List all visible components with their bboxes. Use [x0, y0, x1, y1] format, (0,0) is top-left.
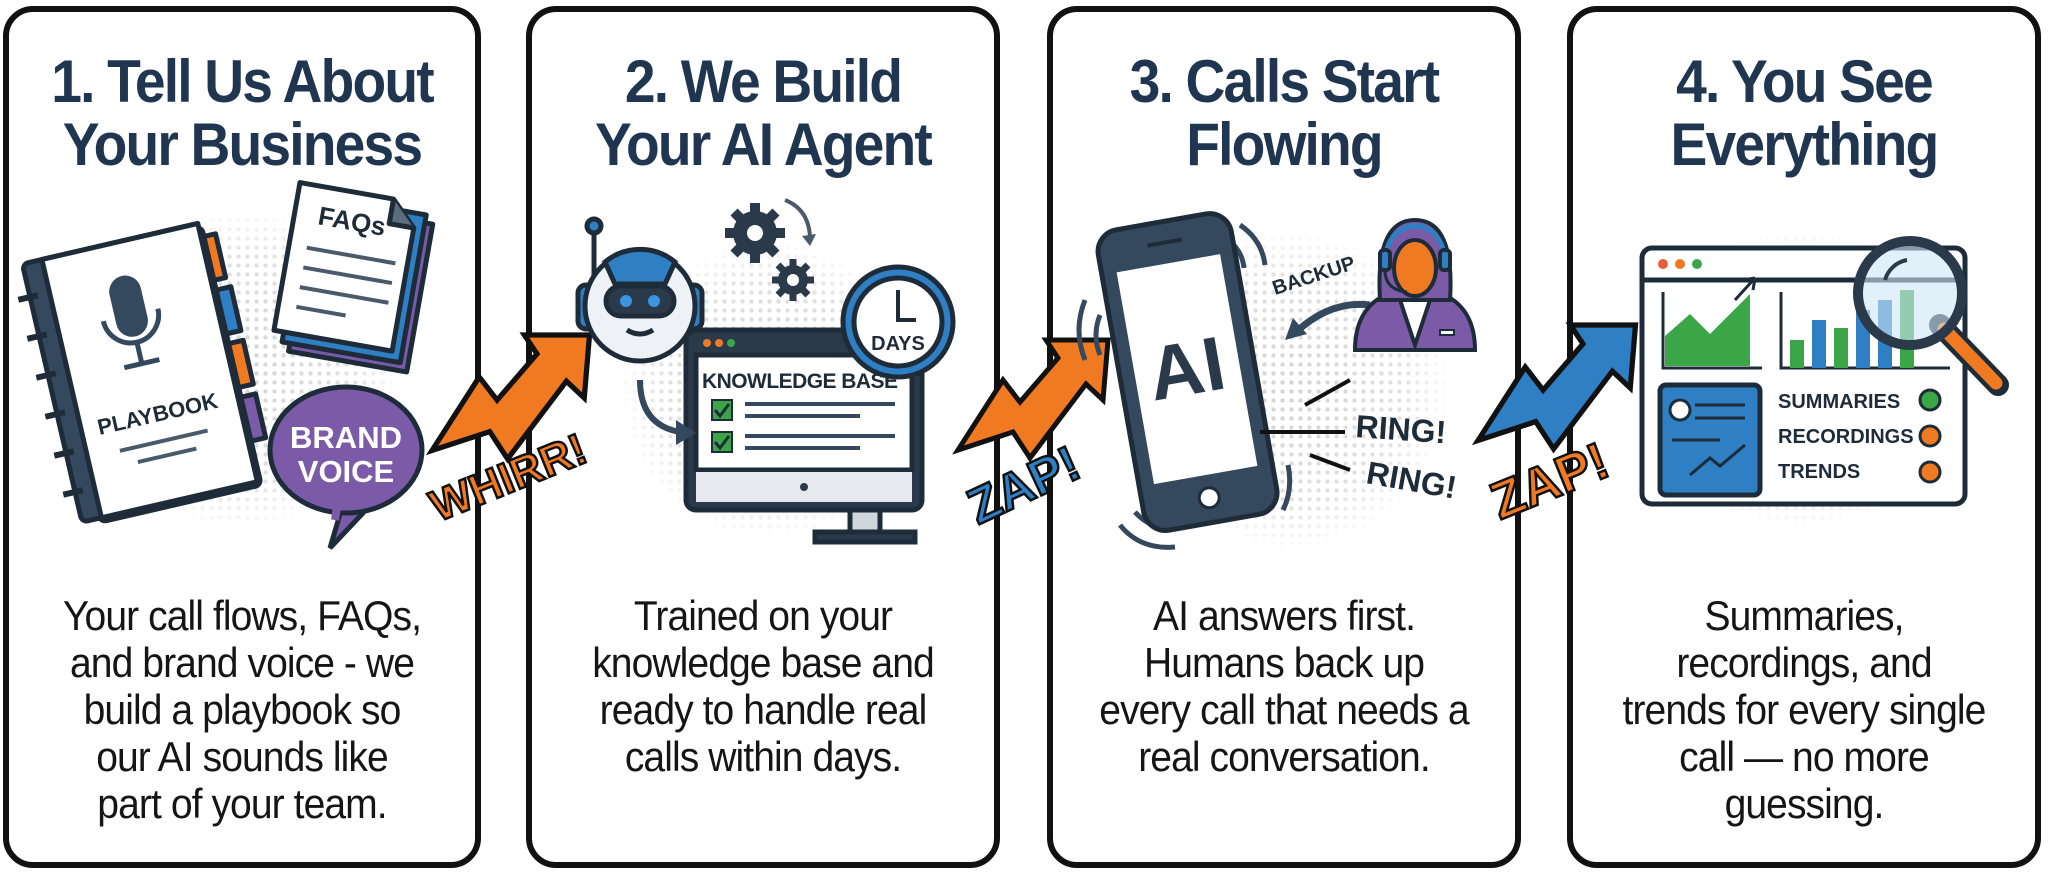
arrow: zap lightning (blue): ZAP! — [1483, 432, 1617, 531]
text: step 1 description: and brand voice - we — [70, 639, 414, 686]
title: step 3 — [1130, 48, 1440, 178]
icon: brand voice speech bubble: VOICE — [298, 454, 394, 489]
text: step 4 description: guessing. — [1725, 780, 1883, 827]
icon: dashboard: SUMMARIES — [1778, 391, 1900, 413]
text: step 1 description: part of your team. — [97, 780, 387, 827]
icon: FAQs papers — [271, 183, 436, 372]
text: step 4 description: Summaries, — [1704, 592, 1904, 639]
arrow: zap lightning (blue) — [1478, 325, 1636, 531]
text: step 3 description: Humans back up — [1144, 639, 1424, 686]
icon: phone with AI: BACKUP — [1270, 252, 1358, 300]
icon: clock days: DAYS — [871, 333, 925, 355]
panel: step 1 — [3, 6, 481, 868]
text: step 4 description: trends for every single — [1623, 686, 1985, 733]
panel: step 3 — [1047, 6, 1521, 868]
title: step 2 — [595, 48, 932, 178]
text: step 4 description: recordings, and — [1676, 639, 1932, 686]
panel: step 2 — [526, 6, 1000, 868]
icon: dashboard: RECORDINGS — [1778, 426, 1914, 448]
icon: dashboard — [1642, 248, 1965, 504]
text: step 4 description — [1623, 592, 1985, 827]
title: step 1: Your Business — [63, 111, 421, 178]
text: step 2 description: ready to handle real — [600, 686, 926, 733]
icon: brand voice speech bubble: BRAND — [290, 420, 402, 455]
text: step 3 description — [1099, 592, 1470, 780]
title: step 2: 2. We Build — [625, 48, 901, 115]
title: step 2: Your AI Agent — [595, 111, 931, 178]
title: step 4: 4. You See — [1676, 48, 1932, 115]
icon: knowledge base monitor — [686, 330, 922, 542]
panel: step 4 — [1567, 6, 2041, 868]
icon: human agent — [1355, 220, 1475, 350]
icon: phone with AI — [1079, 210, 1459, 547]
text: step 1 description: our AI sounds like — [96, 733, 388, 780]
text: step 3 description: real conversation. — [1138, 733, 1430, 780]
halftone backgrounds — [79, 209, 1951, 551]
icon: curved arrow — [640, 380, 680, 432]
title: step 3: 3. Calls Start — [1130, 48, 1438, 115]
text: step 3 description: every call that needs a — [1099, 686, 1469, 733]
text: step 1 description: Your call flows, FAQs, — [63, 592, 421, 639]
text: step 2 description: Trained on your — [634, 592, 892, 639]
icon: phone with AI: AI — [1142, 321, 1231, 418]
text: step 2 description: knowledge base and — [592, 639, 934, 686]
icon: gears — [725, 200, 816, 301]
title: step 4 — [1671, 48, 1937, 178]
icon: phone with AI: RING! — [1355, 408, 1447, 450]
title: step 1 — [51, 48, 434, 178]
arrow: whirr lightning — [423, 335, 594, 531]
icon: robot head — [578, 219, 702, 361]
arrow: whirr lightning: WHIRR! — [423, 425, 594, 531]
text: step 2 description — [592, 592, 934, 780]
icon: clock days — [843, 267, 953, 377]
icon: playbook notebook — [11, 219, 276, 529]
text: step 1 description — [63, 592, 421, 827]
title: step 4: Everything — [1671, 111, 1937, 178]
icon: FAQs papers: FAQs — [316, 201, 388, 242]
arrow: zap lightning (orange) — [958, 340, 1108, 535]
text: step 3 description: AI answers first. — [1153, 592, 1415, 639]
icon: knowledge base monitor: KNOWLEDGE BASE — [702, 370, 898, 393]
text: step 2 description: calls within days. — [625, 733, 901, 780]
arrow: zap lightning (orange): ZAP! — [959, 435, 1088, 535]
text: step 4 description: call — no more — [1679, 733, 1929, 780]
icon: dashboard: TRENDS — [1778, 461, 1860, 483]
icon: phone with AI: RING! — [1364, 454, 1459, 506]
title: step 1: 1. Tell Us About — [51, 48, 433, 115]
title: step 3: Flowing — [1186, 111, 1382, 178]
text: step 1 description: build a playbook so — [84, 686, 400, 733]
icon: magnifier — [1858, 241, 1998, 385]
icon: brand voice speech bubble — [270, 387, 422, 548]
icon: playbook notebook: PLAYBOOK — [95, 388, 220, 440]
